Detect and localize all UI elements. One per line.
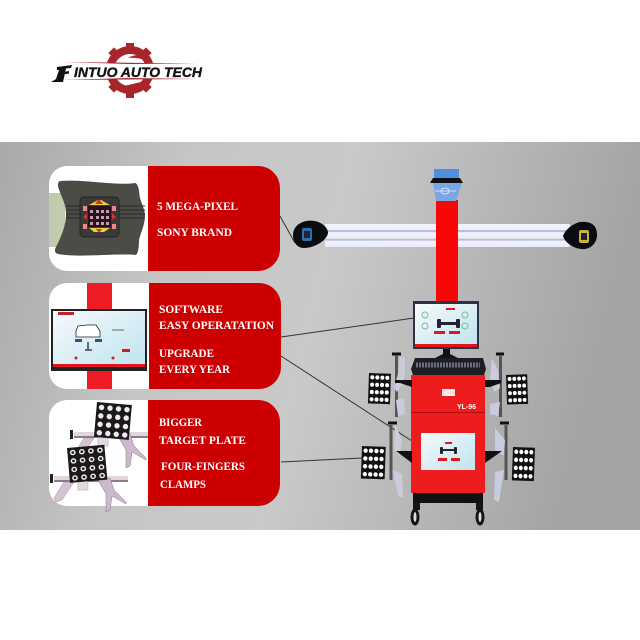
aligner machine: [293, 169, 597, 526]
text: every year: EVERY YEAR: [159, 362, 230, 376]
text: four-fingers: FOUR-FINGERS: [161, 459, 245, 473]
panel image background: [49, 400, 148, 506]
text: easy operatation: EASY OPERATATION: [159, 318, 274, 332]
clamps right: [485, 354, 509, 502]
target plate upper right: [506, 374, 528, 405]
model label: YL-96: [457, 402, 476, 411]
cabinet: [411, 375, 485, 503]
monitor stand: [433, 349, 460, 359]
clamp upper: [70, 430, 148, 468]
panel text box: [149, 283, 281, 389]
text: upgrade: UPGRADE: [159, 346, 214, 360]
camera right: [563, 222, 597, 249]
text: clamps: CLAMPS: [160, 477, 206, 491]
panel text box: [148, 400, 280, 506]
panel image background: [49, 283, 149, 389]
clamps left: [388, 354, 412, 498]
red column: [87, 283, 112, 389]
target plate lower: [67, 445, 107, 483]
panel text box: [148, 166, 280, 271]
panel: software: [49, 283, 281, 389]
cabinet screen: [421, 433, 475, 470]
target plate upper left: [368, 373, 391, 404]
mast: [436, 200, 458, 305]
logo runner mark: [51, 65, 72, 82]
camera beam: [325, 224, 570, 247]
mast head: [430, 169, 463, 201]
clamp lower: [50, 474, 128, 512]
camera left: [293, 221, 328, 248]
monitor: [413, 301, 479, 349]
connector lines: [280, 216, 414, 462]
panel: camera: [49, 166, 280, 271]
keyboard tray: [411, 358, 486, 375]
icon: monitor: [51, 309, 147, 371]
logo: [51, 43, 203, 98]
text: bigger: BIGGER: [159, 415, 202, 429]
text: sony brand: SONY BRAND: [157, 225, 232, 239]
logo gear: [60, 43, 200, 98]
target plate lower left: [361, 446, 386, 479]
target plate upper: [94, 402, 132, 440]
icon: camera housing: [49, 181, 145, 256]
target plate lower right: [512, 447, 535, 481]
panel image background: [49, 166, 148, 271]
panel: target plates: [49, 400, 280, 512]
cabinet base: [413, 493, 483, 503]
logo wordmark: INTUO AUTO TECH: [74, 64, 203, 80]
wheels: [410, 503, 484, 526]
text: target plate: TARGET PLATE: [159, 433, 246, 447]
background band: [0, 142, 640, 530]
text: 5 mega-pixel: 5 MEGA-PIXEL: [157, 199, 238, 213]
text: software: SOFTWARE: [159, 302, 223, 316]
